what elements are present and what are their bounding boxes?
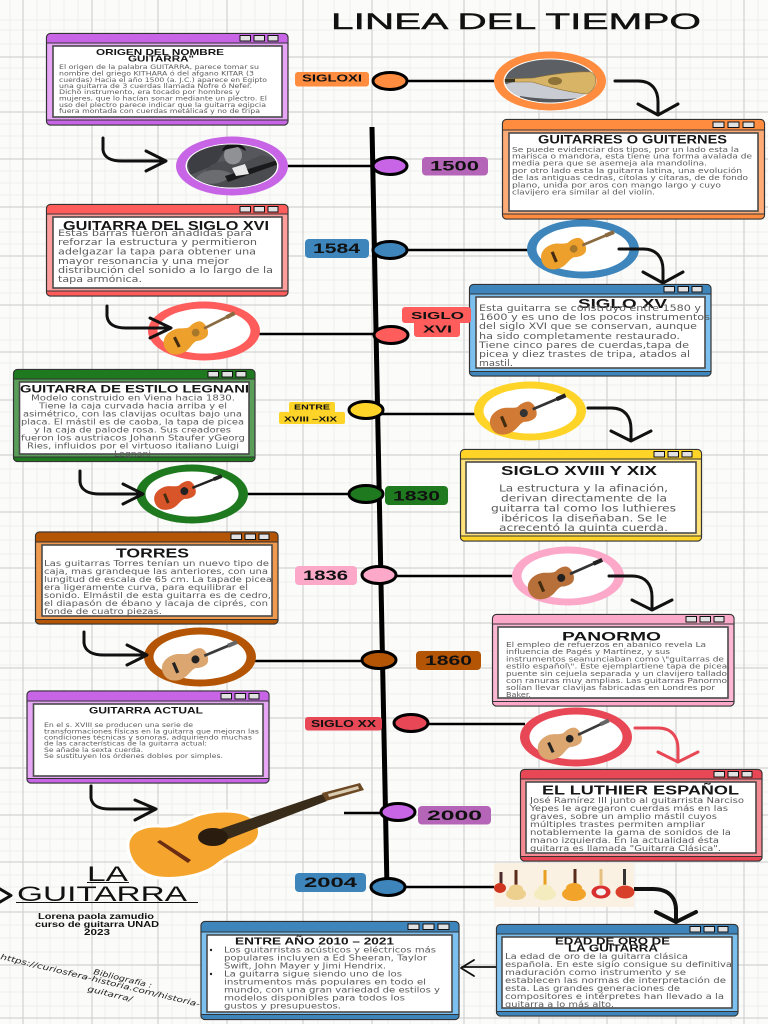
text block: Se puede evidenciar dos tipos, por un lado esta la <box>512 146 739 154</box>
text block: picea y diez trastes de tripa, atados al <box>479 350 690 360</box>
text block: condiciones técnicas y sonoras, adquiriendo muchas <box>44 734 252 742</box>
arrow: edad de oro to 2010 window <box>461 960 496 976</box>
date label: 1830: 1830 <box>393 488 440 504</box>
text block: La estructura y la afinación, <box>499 484 668 494</box>
bibliography <box>0 952 201 1009</box>
text block <box>478 303 710 369</box>
bullet list <box>210 944 440 1010</box>
heading <box>555 936 670 954</box>
text block: lungitud de escala de 65 cm. La tapade picea <box>44 575 272 584</box>
image ring: red with guitar <box>148 302 260 360</box>
big guitar image <box>128 783 364 878</box>
text block: era ligeramente curva, para equilibrar el <box>44 583 248 592</box>
text block: adelgazar la tapa para obtener una <box>58 248 256 258</box>
text block: mano izquierda. En la actualidad ésta <box>530 835 719 845</box>
arrow: red window to guitar <box>107 306 171 338</box>
date label: 2000: 2000 <box>427 808 482 823</box>
panel: guitarra actual <box>27 691 269 783</box>
text block: ha sido completamente restaurado. <box>479 332 680 342</box>
panel: guitarra del siglo xvi <box>46 204 288 296</box>
date label: siglo xvi <box>402 307 471 337</box>
panel: torres <box>36 532 278 624</box>
text block: Yepes le agregaron cuerdas más en las <box>529 803 728 813</box>
text block <box>512 146 752 196</box>
date label: entre xviii - xix <box>279 402 345 424</box>
arrow: guitar row to edad de oro window <box>634 889 696 922</box>
text block: tapa armónica. <box>58 274 142 285</box>
text block: Tiene cinco pares de cuerdas,tapa de <box>478 341 690 351</box>
bibliography: https://curiosfera-historia.com/historia- <box>0 952 201 1009</box>
date label: 1836: 1836 <box>303 568 349 583</box>
text block: maduración como instrumento y se <box>505 967 686 977</box>
text block <box>58 229 273 285</box>
image ring: yellow with guitar <box>474 382 586 440</box>
date label: entre xviii - xix: ENTRE <box>294 402 330 412</box>
text block: 1600 y es uno de los pocos instrumentos <box>479 313 710 323</box>
text block: una guitarra de 3 cuerdas llamada Nofre ó Nefer. <box>59 82 252 90</box>
bibliography: Bibliografía : <box>93 967 153 990</box>
timeline dots <box>349 72 428 896</box>
bibliography: guitarra/ <box>87 984 135 1004</box>
timeline axis <box>372 127 387 888</box>
text block: reforzar la estructura y permitieron <box>58 238 257 248</box>
text block: estilo español\". Este ejemplartiene tapa de picea, <box>506 662 730 670</box>
image ring: blue with guitar <box>527 220 639 278</box>
text block: Baker. <box>506 691 531 699</box>
text block: fueron los austriacos Johann Staufer yGeorg <box>21 434 245 442</box>
heading: GUITARRA" <box>128 54 194 64</box>
arrow: purple window to guitarist <box>103 138 166 171</box>
text block: El origen de la palabra GUITARRA, parece tomar su <box>59 64 259 71</box>
author credits: curso de guitarra UNAD <box>35 920 159 929</box>
author credits: 2023 <box>84 928 111 937</box>
bullet list: Swift, John Mayer y Jimi Hendrix. <box>224 962 386 970</box>
date label: siglo xx <box>305 717 382 730</box>
image ring: crimson with guitar <box>520 708 632 766</box>
text block: En el s. XVIII se producen una serie de <box>44 722 193 729</box>
text block: mayor resonancia y una mejor <box>58 257 229 267</box>
heading: PANORMO <box>562 630 661 644</box>
arrow: pink guitar to panormo window <box>609 576 672 610</box>
image: row of six guitars <box>494 863 634 907</box>
text block: cuerdas) Hacia el año 1500 (a. J.C.) aparece en Egipto <box>59 77 267 84</box>
image ring: guitarist photo <box>176 136 288 196</box>
text block <box>59 64 267 115</box>
arrow: yellow guitar to window <box>588 408 651 441</box>
date label: siglo xi: SIGLOXI <box>302 74 362 84</box>
heading: ENTRE AÑO 2010 – 2021 <box>235 934 395 948</box>
arrow: actual window to big guitar <box>91 786 156 820</box>
text block: uso del plectro parece indicar que la guitarra egipcia <box>59 102 266 109</box>
text block: española. En este sigio consigue su definitiva <box>505 960 732 969</box>
text block: Legnani <box>114 450 151 458</box>
heading <box>96 47 224 64</box>
date label: 1830 <box>385 486 448 505</box>
arrow: red guitar to luthier window <box>635 728 698 762</box>
text block: marisca o mandora, esta tiene una forma avalada de <box>512 152 752 160</box>
date label: 2004: 2004 <box>304 875 358 890</box>
heading: LA GUITARRA <box>568 944 658 954</box>
text block: Se añade la sexta cuerda. <box>44 747 143 754</box>
text block: y la caja de palode rosa. Sus creadores <box>34 426 231 434</box>
heading: GUITARRES O GUITERNES <box>538 134 727 146</box>
text block: Ries, influidos por el virtuoso italiano Luigi <box>27 442 239 450</box>
date label: siglo xi <box>295 72 369 86</box>
text block: Tiene la caja curvada hacia arriba y el <box>38 402 227 410</box>
text block: fonde de cuatro piezas. <box>44 607 162 616</box>
text block: nombre del griego KITHARA ó del afgano KITAR (3 <box>59 70 254 78</box>
text block: transformaciones físicas en la guitarra que mejoran las <box>44 728 259 736</box>
heading: GUITARRA ACTUAL <box>89 706 203 716</box>
arrow: lute to guitarres window <box>615 81 678 115</box>
date label: 1836 <box>295 566 357 585</box>
text block: derivan directamente de la <box>501 494 667 504</box>
bullet list: populares incluyen a Ed Sheeran, Taylor <box>224 954 428 962</box>
heading: SIGLO XVIII Y XIX <box>501 464 658 478</box>
text block: de las antiguas cedras, cítolas y cítaras, de de fondo <box>512 174 748 182</box>
panel: panormo <box>492 614 734 706</box>
arrow: torres window to guitar <box>84 632 147 665</box>
text block: establecen las normas de interpretación de <box>505 975 726 985</box>
text block: fuera montada con cuerdas metálicas y no de tripa <box>59 107 260 115</box>
bullet list: Los guitarristas acústicos y eléctricos más <box>224 944 436 954</box>
heading: EL LUTHIER ESPAÑOL <box>542 782 739 798</box>
author credits <box>35 912 159 937</box>
text block: guitarra a lo más alto. <box>505 1000 614 1009</box>
text block: media pera que se asemeja ala mandolina. <box>512 160 707 168</box>
text block <box>21 394 245 458</box>
text block: Se sustituyen los órdenes dobles por simples. <box>44 752 223 760</box>
text block: compositores e intérpretes han llevado a la <box>505 991 724 1001</box>
image ring: lute <box>494 52 606 110</box>
date label: 1584 <box>305 239 369 258</box>
text block: guitarra tal como los luthieres <box>491 504 676 514</box>
connector lines <box>245 81 530 887</box>
panel: origen del nombre <box>46 34 288 125</box>
main heading: la guitarra: GUITARRA <box>17 883 187 906</box>
text block: clavijero era similar al del violín. <box>512 188 655 196</box>
arrow: pointer to la guitarra <box>0 889 11 902</box>
text block <box>506 641 730 699</box>
text block: Esta guitarra se construyó entre 1580 y <box>479 303 702 314</box>
text block: Las guitarras Torres tenían un nuevo tipo de <box>44 559 269 568</box>
arrow: green window to guitar <box>80 471 143 504</box>
text block: esta. Las grandes generaciones de <box>505 984 680 993</box>
bullet list: instrumentos más populares en todo el <box>224 978 426 986</box>
heading: GUITARRA DE ESTILO LEGNANI <box>20 384 249 396</box>
date label: siglo xvi: XVI <box>423 324 452 336</box>
text block <box>44 559 272 616</box>
panel: guitarra de estilo legnani <box>14 370 255 462</box>
bullet list: mundo, con una gran variedad de estilos y <box>224 986 440 994</box>
date label: 1500 <box>422 157 488 176</box>
panel: siglo xviii y xix <box>460 450 702 541</box>
date label: siglo xx: SIGLO XX <box>311 719 376 730</box>
text block: acrecentó la quinta cuerda. <box>499 523 668 534</box>
panel: entre año 2010 - 2021 <box>201 922 459 1020</box>
panel: edad de oro de la guitarra <box>496 924 738 1016</box>
text block: por otro lado esta la guitarra latina, una evolución <box>512 167 742 175</box>
text block: Dicho instrumento, era tocado por hombres y <box>59 89 240 96</box>
text block: El empleo de refuerzos en abanico revela La <box>506 641 706 649</box>
text block: Modelo construido en Viena hacia 1830. <box>31 394 235 402</box>
text block: caja, mas grandeque las anteriores, con una <box>44 567 268 576</box>
main heading: la guitarra <box>16 863 198 906</box>
text block: instrumentos seanunciaban como \"guitarras de <box>506 656 724 664</box>
date label: entre xviii - xix: XVIII –XIX <box>284 414 337 424</box>
heading: GUITARRA DEL SIGLO XVI <box>63 219 269 233</box>
panel: el luthier español <box>520 770 762 861</box>
text block: placa. El mástil es de caoba, la tapa de picea <box>21 418 244 426</box>
heading: EDAD DE ORO DE <box>555 936 670 948</box>
text block <box>44 722 259 760</box>
date label: siglo xvi: SIGLO <box>411 310 464 322</box>
text block <box>529 795 744 853</box>
date label: 1860 <box>416 651 481 670</box>
text block: influencia de Pagés y Martínez, y sus <box>506 648 671 656</box>
text block: el diapasón de ébano y lacaja de ciprés, con <box>44 598 268 608</box>
date label: 1860: 1860 <box>425 653 472 668</box>
text block <box>505 952 732 1009</box>
heading: SIGLO XV <box>578 297 668 311</box>
text block: graves, sobre un amplio mástil cuyos <box>530 811 717 821</box>
image ring: green with guitar <box>136 464 248 524</box>
heading: ORIGEN DEL NOMBRE <box>96 47 224 57</box>
text block: asimétrico, con las clavijas ocultas bajo una <box>23 410 242 418</box>
title: LINEA DEL TIEMPO <box>331 9 701 34</box>
date label: 2004 <box>295 873 366 892</box>
main heading: la guitarra: LA <box>87 863 128 886</box>
date label: 1500: 1500 <box>430 158 479 174</box>
text block: José Ramírez III junto al guitarrista Narciso <box>529 795 744 805</box>
text block: múltiples trastes permiten ampliar <box>530 819 706 829</box>
bullet list: gustos y presupuestos. <box>224 1002 341 1010</box>
text block: del siglo XVI que se conservan, aunque <box>479 322 698 332</box>
text block: con ranuras muy amplias. Las guitarras Panormo <box>506 677 727 685</box>
panel: siglo xv <box>470 284 711 376</box>
image ring: pink with guitar <box>512 546 624 606</box>
panel: guitarres o guiternes <box>502 120 764 219</box>
text block: de las características de la guitarra actual: <box>44 740 207 748</box>
date label: 2000 <box>418 806 491 824</box>
arrow: blue guitar to siglo xv window <box>619 249 683 283</box>
bullet list: La guitarra sigue siendo uno de los <box>224 970 402 978</box>
text block: ibéricos la diseñaban. Se le <box>501 514 667 524</box>
text block: puente sin cejuela separada y un clavijero tallado <box>506 670 727 678</box>
text block: Estas barras fueron añadidas para <box>58 229 252 239</box>
text block: mujeres, que lo hacían sonar mediante un plectro. El <box>59 94 267 102</box>
author credits: Lorena paola zamudio <box>38 912 154 921</box>
text block: mastil. <box>479 359 513 369</box>
date label: 1584: 1584 <box>313 241 361 256</box>
text block: guitarra es llamada "Guitarra Clásica". <box>530 843 721 853</box>
text block: solían llevar clavijas fabricadas en Londres por <box>506 684 715 692</box>
text block: sonido. Elmástil de esta guitarra es de cedro, <box>44 591 271 600</box>
image ring: brown with guitar <box>144 628 256 686</box>
bullet list: modelos disponibles para todos los <box>224 994 405 1002</box>
text block <box>491 484 676 534</box>
text block: plano, unida por aros con mango largo y cuyo <box>512 182 721 190</box>
heading: TORRES <box>116 546 189 560</box>
text block: La edad de oro de la guitarra clásica <box>505 952 688 961</box>
text block: notablemente la gama de sonidos de la <box>530 827 731 837</box>
text block: distribución del sonido a lo largo de la <box>58 265 273 276</box>
